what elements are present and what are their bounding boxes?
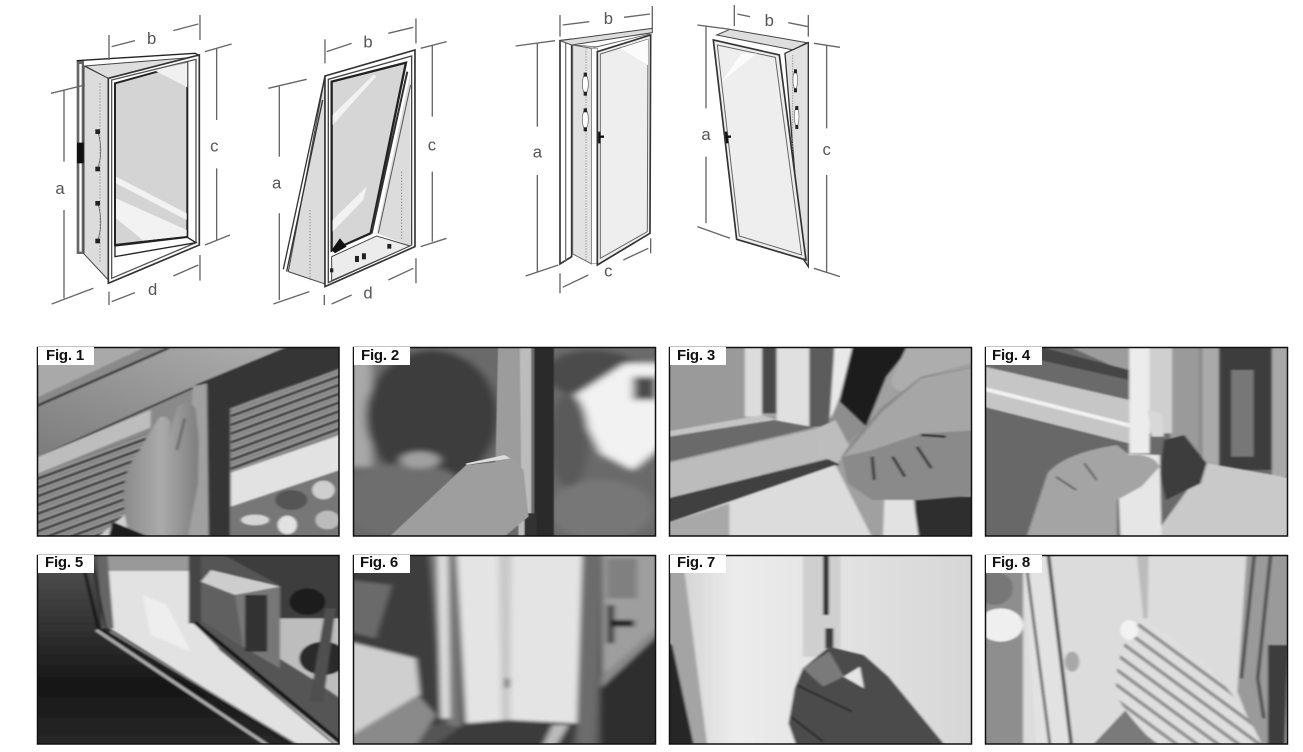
label: Fig. 3: Fig. 3: [677, 347, 715, 364]
label: Fig. 6: [354, 554, 410, 573]
panel: Fig. 6: [336, 542, 667, 752]
diagram: outward-opening casement window with dimensions: [51, 15, 232, 305]
photo: hand attaching clip to window frame: [670, 348, 971, 536]
label: Fig. 5: Fig. 5: [45, 554, 83, 571]
label: Fig. 1: Fig. 1: [46, 347, 84, 364]
dimension labels: a: [533, 142, 543, 161]
dimension labels: a: [55, 179, 65, 198]
dimension labels: d: [363, 283, 373, 302]
panel: Fig. 2: [336, 333, 673, 553]
panel: Fig. 3: [648, 333, 997, 553]
diagram: tilted window with seal, side view: [697, 5, 840, 277]
diagram: top-hinged awning window with dimensions: [268, 18, 447, 305]
photo frame: [986, 348, 1288, 536]
dimension lines: [697, 5, 840, 277]
icon: lower zip: [95, 201, 101, 243]
dimension labels: [55, 29, 218, 299]
label: Fig. 5: [38, 554, 94, 573]
label: Fig. 8: [986, 554, 1042, 573]
panel: Fig. 5: [14, 542, 360, 752]
dimension labels: c: [210, 137, 218, 156]
dimension labels: d: [148, 280, 157, 299]
icon: lower zip: [794, 106, 799, 129]
icon: handle: [599, 132, 604, 143]
dimension labels: [533, 9, 613, 281]
dimension labels: b: [363, 32, 373, 51]
icon: upper zip: [582, 73, 588, 96]
photo frame: [38, 556, 339, 744]
dimension labels: c: [822, 140, 831, 159]
photo frame: [670, 556, 972, 744]
label: Fig. 6: Fig. 6: [360, 554, 398, 571]
panel: Fig. 1: [14, 333, 360, 553]
panel: Fig. 4: [970, 333, 1303, 553]
icon: zips: [330, 244, 391, 272]
label: Fig. 4: [986, 347, 1042, 365]
icon: upper zip: [793, 69, 798, 92]
dimension lines: [268, 18, 447, 305]
panel: Fig. 7: [648, 542, 995, 752]
icon: upper zip: [95, 129, 101, 171]
photo frame: [986, 556, 1288, 744]
dimension labels: c: [604, 262, 612, 281]
dimension labels: a: [701, 125, 711, 144]
label: Fig. 8: Fig. 8: [992, 554, 1030, 571]
icon: latch: [332, 238, 347, 253]
photo: hand threading fabric strip by hinge: [986, 348, 1287, 536]
label: Fig. 2: Fig. 2: [361, 347, 399, 364]
icon: lower zip: [582, 108, 588, 131]
photo: exhaust hose through fabric opening: [986, 556, 1287, 744]
label: Fig. 3: [670, 347, 726, 365]
label: Fig. 4: Fig. 4: [992, 347, 1031, 364]
diagram: closed casement with seal, side view: [516, 6, 652, 293]
photo: fabric sealed in open window: [354, 556, 655, 744]
photo frame: [670, 348, 972, 536]
dimension labels: [272, 32, 436, 302]
photo: hand closing zip in fabric: [670, 556, 971, 744]
label: Fig. 7: Fig. 7: [677, 554, 715, 571]
dimension lines: [516, 6, 652, 293]
label: Fig. 7: [670, 554, 726, 573]
photo: hand fixing seal with blurred trees: [354, 348, 655, 536]
dimension lines: [51, 15, 232, 305]
dimension labels: b: [604, 9, 613, 28]
photo frame: [38, 348, 339, 536]
dimension labels: b: [765, 11, 774, 30]
label: Fig. 2: [354, 347, 410, 365]
dimension labels: c: [428, 136, 436, 155]
photo frame: [354, 556, 656, 744]
label: Fig. 1: [38, 347, 94, 365]
photo frame: [354, 348, 656, 536]
icon: handle: [726, 132, 731, 143]
panel: Fig. 8: [970, 542, 1301, 752]
dimension labels: [701, 11, 831, 159]
photo: hand pressing seal on window frame: [38, 348, 338, 536]
dimension labels: b: [147, 29, 156, 48]
dimension labels: a: [272, 173, 282, 192]
icon: latch: [77, 143, 84, 163]
photo: tilted window with fabric, outdoor unit outside: [38, 556, 338, 744]
